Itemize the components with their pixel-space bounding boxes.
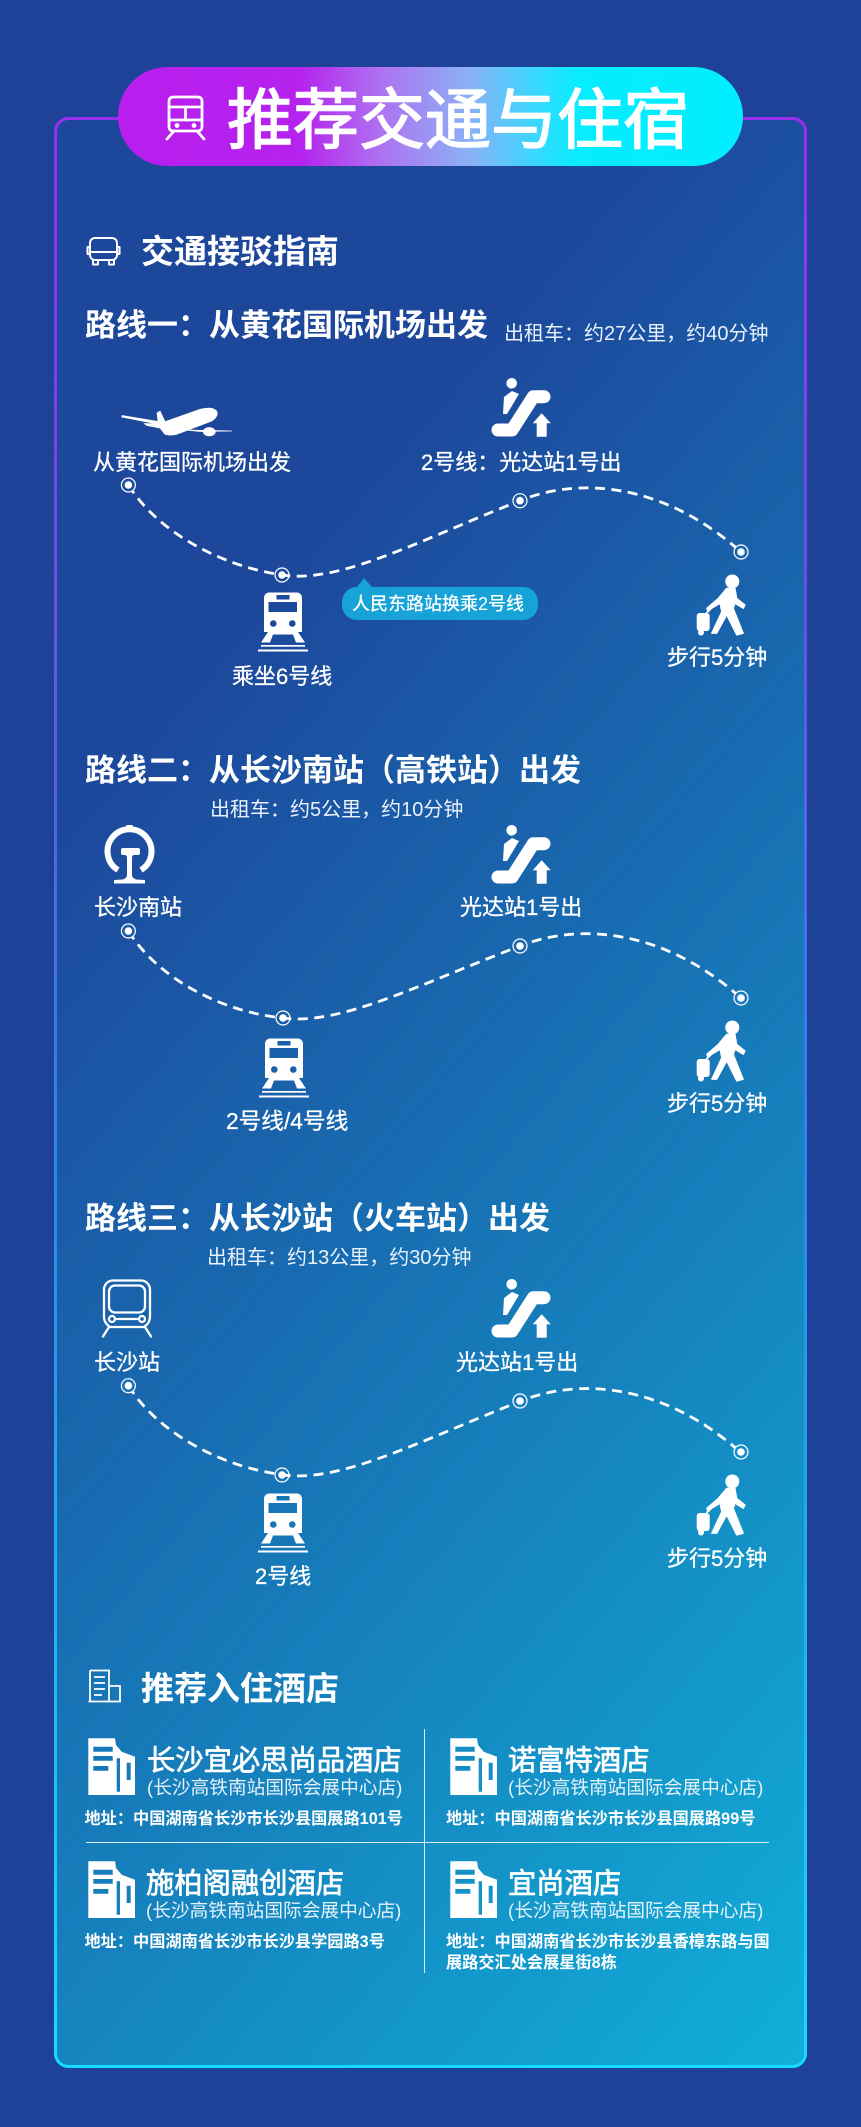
icon: metro train	[258, 592, 308, 652]
hotel: Yishang	[446, 1861, 770, 1972]
icon: hotel building	[88, 1861, 135, 1918]
icon: walking with luggage	[697, 1474, 745, 1536]
icon: escalator	[498, 825, 551, 884]
label: Changsha South: 长沙南站	[94, 895, 182, 920]
hotel: Ibis Styles: 地址：中国湖南省长沙市长沙县国展路101号	[84, 1809, 403, 1828]
hotel: Yishang: 宜尚酒店	[508, 1867, 621, 1899]
label: walk: 步行5分钟	[667, 1546, 767, 1571]
route two heading: 路线二：从长沙南站（高铁站）出发	[85, 753, 581, 788]
route one taxi note: 出租车：约27公里，约40分钟	[504, 322, 768, 345]
hotel: Yishang: 地址：中国湖南省长沙市长沙县香樟东路与国	[446, 1932, 770, 1951]
icon: metro train	[258, 1494, 308, 1552]
title banner	[118, 67, 743, 166]
icon: bus	[88, 238, 120, 264]
icon: airplane	[122, 408, 232, 436]
label: Changsha station: 长沙站	[94, 1350, 160, 1375]
hotel: Ibis Styles: 长沙宜必思尚品酒店	[147, 1744, 402, 1776]
label: airport: 从黄花国际机场出发	[93, 450, 291, 475]
icon: escalator	[498, 1279, 551, 1338]
icon: hotel building	[88, 1738, 135, 1795]
icon: train	[167, 97, 204, 139]
icon: metro train	[259, 1038, 309, 1098]
route one stops	[121, 478, 748, 582]
hotel: Ibis Styles: (长沙高铁南站国际会展中心店)	[147, 1777, 402, 1798]
label: line 2: 2号线	[255, 1564, 311, 1589]
hotel: Sheraton Rong Chuang: 施柏阁融创酒店	[146, 1867, 344, 1899]
icon: hotel building	[450, 1738, 497, 1795]
route three heading: 路线三：从长沙站（火车站）出发	[85, 1201, 550, 1236]
label: metro exit: 光达站1号出	[456, 1350, 578, 1375]
hotel grid dividers	[86, 1729, 769, 1973]
hotel: Novotel: 诺富特酒店	[508, 1744, 650, 1776]
label: line 6: 乘坐6号线	[232, 664, 332, 689]
section heading: hotels: 推荐入住酒店	[141, 1670, 339, 1707]
route two stops	[121, 924, 748, 1025]
icon: walking with luggage	[697, 574, 745, 636]
label: metro exit: 光达站1号出	[460, 895, 582, 920]
main panel	[56, 118, 806, 2066]
callout: transfer	[342, 578, 538, 620]
title text: 推荐交通与住宿	[227, 83, 689, 157]
hotel: Novotel: (长沙高铁南站国际会展中心店)	[508, 1777, 763, 1798]
section heading: transport guide: 交通接驳指南	[141, 233, 339, 270]
hotel: Sheraton Rong Chuang	[84, 1861, 401, 1951]
icon: train outline	[103, 1280, 151, 1336]
hotel: Novotel	[446, 1738, 763, 1828]
route one heading: 路线一：从黄花国际机场出发	[85, 308, 488, 343]
route three	[85, 1201, 767, 1589]
label: lines 2 and 4: 2号线/4号线	[226, 1108, 348, 1134]
route three taxi note: 出租车：约13公里，约30分钟	[207, 1246, 472, 1269]
label: metro exit: 2号线：光达站1号出	[421, 450, 621, 475]
route three dashed path	[128, 1386, 741, 1476]
route two	[85, 753, 767, 1134]
label: walk: 步行5分钟	[667, 1091, 767, 1116]
icon: escalator	[498, 378, 551, 437]
route two dashed path	[128, 931, 741, 1019]
hotel: Yishang: 展路交汇处会展星街8栋	[446, 1953, 617, 1972]
hotel: Yishang: (长沙高铁南站国际会展中心店)	[508, 1900, 763, 1921]
route two taxi note: 出租车：约5公里，约10分钟	[210, 798, 463, 821]
icon: building outline	[88, 1670, 121, 1702]
hotel: Sheraton Rong Chuang: 地址：中国湖南省长沙市长沙县学园路3号	[84, 1932, 385, 1951]
hotel: Sheraton Rong Chuang: (长沙高铁南站国际会展中心店)	[146, 1900, 401, 1921]
callout: transfer: 人民东路站换乘2号线	[352, 594, 524, 614]
icon: hotel building	[450, 1861, 497, 1918]
label: walk: 步行5分钟	[667, 645, 767, 670]
route three stops	[121, 1379, 748, 1482]
route one dashed path	[128, 485, 741, 576]
icon: walking with luggage	[697, 1020, 745, 1082]
route one	[85, 308, 768, 689]
hotel: Ibis Styles	[84, 1738, 403, 1828]
icon: high speed rail logo	[108, 825, 152, 884]
hotel: Novotel: 地址：中国湖南省长沙市长沙县国展路99号	[446, 1809, 755, 1828]
